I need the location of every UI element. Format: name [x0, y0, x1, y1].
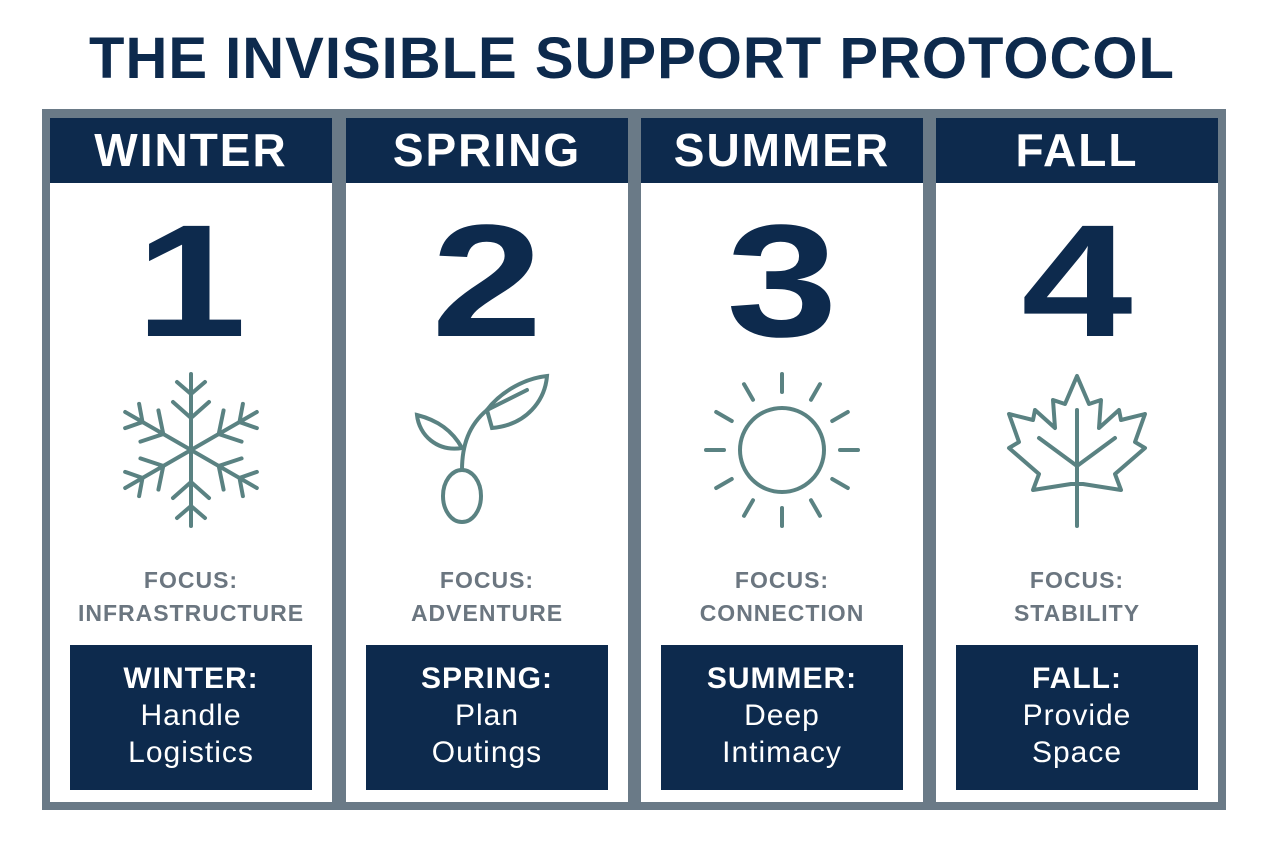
box: fall: Space: [1032, 736, 1122, 769]
focus text: FOCUS:: [1030, 567, 1124, 593]
header: spring: [346, 118, 628, 183]
focus text: FOCUS:: [440, 567, 534, 593]
box: fall: FALL:: [1032, 662, 1122, 695]
panel: summer: [641, 118, 923, 802]
focus text: INFRASTRUCTURE: [78, 600, 304, 626]
frame: [42, 109, 1226, 810]
panel: fall: [936, 118, 1218, 802]
icon: snowflake: [123, 372, 259, 528]
header: summer: SUMMER: [674, 124, 890, 176]
box: spring: Plan: [455, 699, 519, 732]
panel: spring: [346, 118, 628, 802]
box: winter: Handle: [140, 699, 242, 732]
box: summer: Intimacy: [722, 736, 842, 769]
box: fall: [956, 645, 1198, 790]
icon: sun: [704, 372, 860, 528]
box: spring: [366, 645, 608, 790]
focus text: ADVENTURE: [411, 600, 563, 626]
box: spring: SPRING:: [421, 662, 553, 695]
title: THE INVISIBLE SUPPORT PROTOCOL: [89, 26, 1175, 91]
header: winter: WINTER: [94, 124, 288, 176]
number 1: 1: [135, 191, 247, 370]
box: summer: SUMMER:: [707, 662, 857, 695]
focus text: [1014, 567, 1140, 626]
header: summer: [641, 118, 923, 183]
box: summer: [661, 645, 903, 790]
focus text: [411, 567, 563, 626]
box: spring: Outings: [432, 736, 542, 769]
focus text: FOCUS:: [144, 567, 238, 593]
focus text: FOCUS:: [735, 567, 829, 593]
focus text: STABILITY: [1014, 600, 1140, 626]
number 4: 4: [1021, 191, 1133, 370]
box: fall: Provide: [1023, 699, 1131, 732]
box: winter: [70, 645, 312, 790]
icon: sprout: [414, 374, 550, 524]
focus text: [78, 567, 304, 626]
header: fall: [936, 118, 1218, 183]
box: summer: Deep: [744, 699, 820, 732]
header: fall: FALL: [1016, 124, 1138, 176]
panel: winter: [50, 118, 332, 802]
focus text: [700, 567, 864, 626]
box: winter: WINTER:: [123, 662, 259, 695]
number 3: 3: [726, 191, 838, 370]
header: winter: [50, 118, 332, 183]
header: spring: SPRING: [393, 124, 581, 176]
focus text: CONNECTION: [700, 600, 864, 626]
icon: maple leaf: [1006, 374, 1148, 528]
number 2: 2: [431, 191, 543, 370]
box: winter: Logistics: [128, 736, 254, 769]
